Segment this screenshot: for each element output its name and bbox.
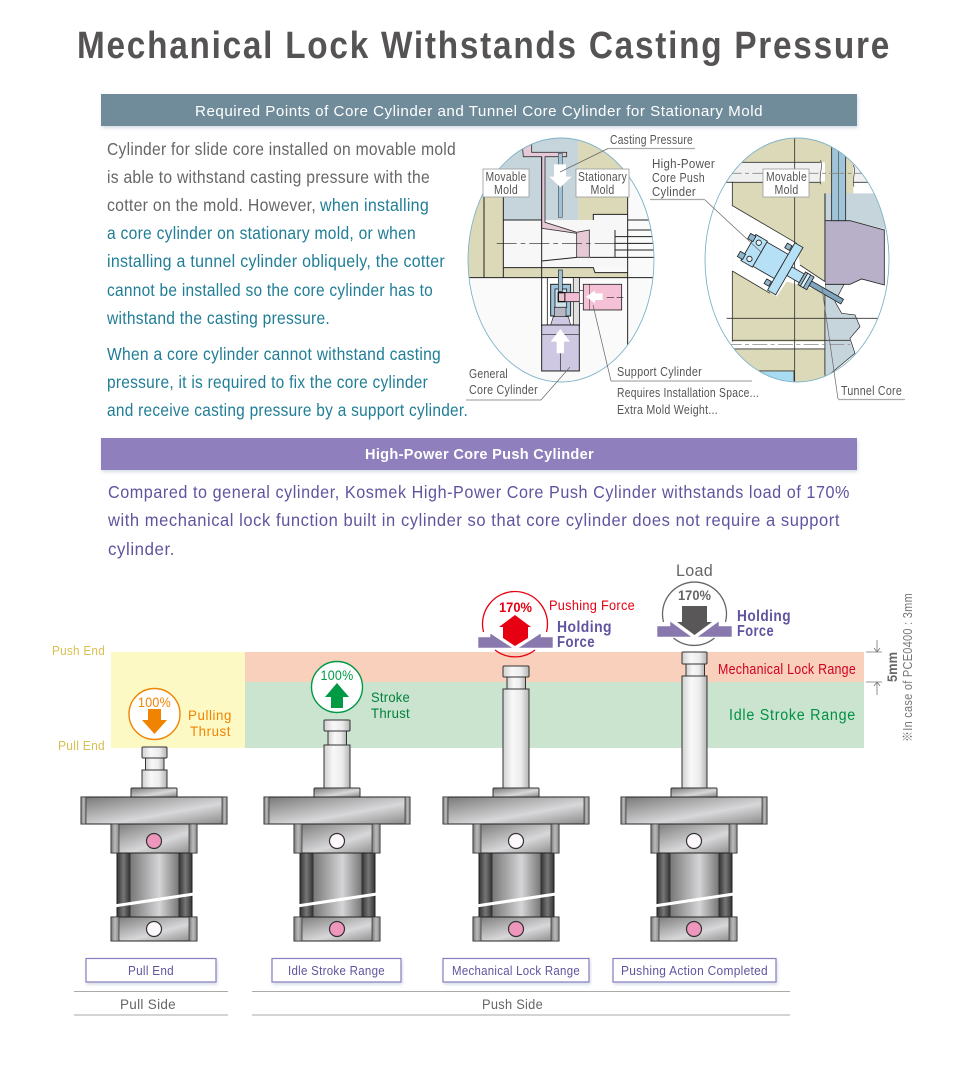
label: movable mold right <box>763 169 809 197</box>
section header: high-power core push cylinder <box>101 438 857 470</box>
text block: support cylinder requirement <box>107 344 468 420</box>
text block: high-power description: with mechanical lock function built in cylinder so that core cylinder does not require a support <box>107 510 840 530</box>
label: push side <box>252 992 790 1015</box>
label: pushing action completed: Pushing Action Completed <box>621 964 768 978</box>
callout: tunnel core <box>822 288 905 400</box>
icon: pushing force 170% with holding force: 170% <box>499 599 533 615</box>
callout: high-power core push cylinder: Cylinder <box>652 185 696 199</box>
section header: required points: Required Points of Core Cylinder and Tunnel Core Cylinder for Stationary Mold <box>195 103 763 120</box>
label: pull side <box>74 992 228 1015</box>
cylinder: mechanical lock range <box>443 666 589 941</box>
callout: high-power core push cylinder <box>650 157 762 253</box>
dimension: 5mm lock range <box>866 593 915 742</box>
callout: general core cylinder: Core Cylinder <box>469 383 538 397</box>
label: movable mold <box>483 169 529 197</box>
cylinder: pull end <box>81 747 227 941</box>
chart: stroke range bands: Push End <box>52 643 105 658</box>
label: stationary mold: Stationary <box>578 170 627 184</box>
text block: cylinder explanation: is able to withstand casting pressure with the <box>107 167 430 187</box>
cylinder: pushing action completed <box>621 652 767 941</box>
icon: pushing force 170% with holding force: Holding <box>557 619 612 636</box>
dimension: 5mm lock range: ※In case of PCE0400 : 3mm <box>901 593 915 742</box>
icon: stroke thrust 100%: 100% <box>320 667 354 683</box>
icon: core cylinder arrow <box>551 329 570 353</box>
callout: high-power core push cylinder: Core Push <box>652 171 705 185</box>
icon: stroke thrust 100% <box>312 662 410 721</box>
icon: casting pressure arrow <box>549 164 572 187</box>
text block: cylinder explanation: installing a tunnel cylinder obliquely, the cotter <box>107 251 445 271</box>
callout: casting pressure: Casting Pressure <box>610 133 693 147</box>
icon: load 170% with holding force: Load <box>676 561 713 580</box>
text block: high-power description <box>107 482 850 559</box>
dimension: 5mm lock range: 5mm <box>885 652 900 682</box>
text block: support cylinder requirement: pressure, it is required to fix the core cylinder <box>107 372 428 392</box>
callout: tunnel core: Tunnel Core <box>841 384 902 398</box>
text block: support cylinder requirement: When a core cylinder cannot withstand casting <box>107 344 441 364</box>
icon: pulling thrust 100%: Pulling <box>188 707 232 723</box>
label: movable mold: Movable <box>486 170 526 184</box>
callout: high-power core push cylinder: High-Power <box>652 157 715 171</box>
callout: casting pressure <box>560 133 695 172</box>
chart: stroke range bands <box>52 643 864 753</box>
text block: cylinder explanation: a core cylinder on stationary mold, or when <box>107 223 416 243</box>
text block: cylinder explanation: cannot be installed so the core cylinder has to <box>107 280 433 300</box>
callout: support cylinder: Extra Mold Weight... <box>617 403 718 417</box>
text block: cylinder explanation <box>106 139 456 328</box>
text block: high-power description: cylinder. <box>108 539 175 559</box>
icon: load 170% with holding force: Force <box>737 623 774 640</box>
label: mechanical lock range <box>443 958 589 982</box>
icon: stroke thrust 100%: Stroke <box>371 689 410 705</box>
label: stationary mold: Mold <box>590 183 614 197</box>
icon: pushing force 170% with holding force: Pushing Force <box>549 598 635 613</box>
callout: general core cylinder: General <box>469 367 508 381</box>
callout: general core cylinder <box>466 367 570 400</box>
label: movable mold right: Mold <box>774 183 798 197</box>
cylinder: idle stroke range <box>264 720 410 941</box>
icon: pulling thrust 100%: Thrust <box>190 723 231 739</box>
diagram: tunnel core cylinder <box>650 125 905 400</box>
callout: support cylinder <box>593 305 759 417</box>
label: idle stroke range: Idle Stroke Range <box>288 964 385 978</box>
text block: cylinder explanation: when installing <box>319 195 429 215</box>
text block: high-power description: Compared to general cylinder, Kosmek High-Power Core Push Cylinder withstands load of 170% <box>108 482 850 502</box>
section header: high-power core push cylinder: High-Power Core Push Cylinder <box>365 447 594 463</box>
icon: pushing force 170% with holding force <box>478 591 635 657</box>
label: pushing action completed <box>613 958 776 982</box>
icon: pulling thrust 100% <box>129 688 232 740</box>
icon: load 170% with holding force: 170% <box>678 587 712 603</box>
text block: cylinder explanation: cotter on the mold. However, <box>107 195 316 215</box>
chart: stroke range bands: Pull End <box>58 738 105 753</box>
label: push side: Push Side <box>482 996 543 1012</box>
icon: pulling thrust 100%: 100% <box>138 694 171 710</box>
label: pull side: Pull Side <box>120 996 176 1012</box>
icon: load 170% with holding force <box>657 561 791 645</box>
text block: cylinder explanation: withstand the casting pressure. <box>106 308 330 328</box>
chart: stroke range bands: Idle Stroke Range <box>729 707 856 724</box>
text block: support cylinder requirement: and receive casting pressure by a support cylinder. <box>107 400 468 420</box>
label: pull end: Pull End <box>128 964 174 978</box>
label: idle stroke range <box>272 958 401 982</box>
section header: required points <box>101 94 857 126</box>
label: pull end <box>86 958 216 982</box>
text block: cylinder explanation: Cylinder for slide core installed on movable mold <box>107 139 456 159</box>
icon: load 170% with holding force: Holding <box>737 608 791 625</box>
icon: stroke thrust 100%: Thrust <box>371 705 410 721</box>
diagram: core cylinder with support cylinder <box>460 125 759 417</box>
label: movable mold: Mold <box>494 183 518 197</box>
callout: support cylinder: Requires Installation Space... <box>617 386 759 400</box>
label: stationary mold <box>576 169 629 197</box>
icon: support cylinder arrow <box>586 291 603 303</box>
chart: stroke range bands: Mechanical Lock Range <box>718 661 856 678</box>
label: mechanical lock range: Mechanical Lock Range <box>452 964 580 978</box>
callout: support cylinder: Support Cylinder <box>617 365 702 379</box>
icon: pushing force 170% with holding force: Force <box>557 634 595 651</box>
label: movable mold right: Movable <box>766 170 807 184</box>
